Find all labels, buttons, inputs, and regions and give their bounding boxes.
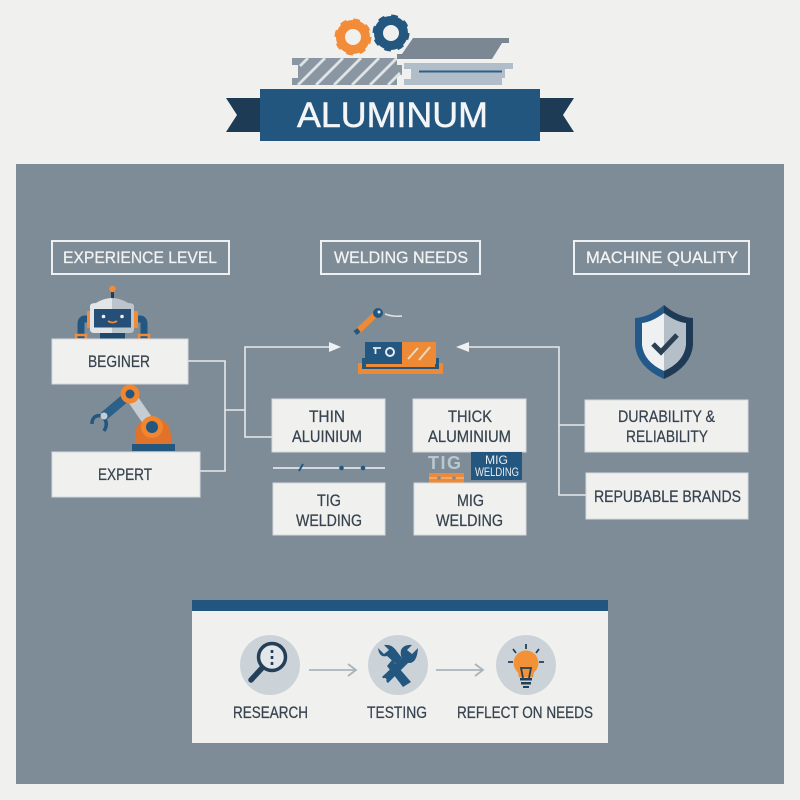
- heading: experience level: EXPERIENCE LEVEL: [63, 248, 217, 267]
- icon: testing tools: [368, 635, 428, 695]
- icon: thin weld seam: [273, 464, 385, 471]
- icon: welding machine: [358, 342, 443, 374]
- icon: MIG welding tag: WELDING: [475, 467, 519, 479]
- box: thick aluminium: THICK: [448, 408, 492, 426]
- box: durability and reliability: [585, 400, 748, 452]
- icon: shield with check: [635, 305, 693, 379]
- icon: blue gear: [375, 17, 407, 49]
- heading: machine quality: MACHINE QUALITY: [586, 248, 738, 267]
- box: expert: EXPERT: [98, 466, 152, 484]
- box: tig welding: [273, 483, 385, 535]
- icon: robot: [76, 286, 149, 339]
- icon: MIG welding tag: MIG: [485, 455, 508, 467]
- title: ALUMINUM: [297, 96, 488, 135]
- heading: welding needs: [321, 241, 480, 274]
- lower right plate: [404, 63, 513, 85]
- banner body: [260, 89, 540, 141]
- box: mig welding: WELDING: [436, 512, 503, 530]
- box: expert: [52, 452, 200, 497]
- icon: TIG label with plate: [428, 453, 464, 483]
- arrow: research to testing: [309, 664, 356, 676]
- icon: MIG welding tag: [471, 452, 522, 480]
- box: thin aluminium: [272, 399, 385, 452]
- box: thin aluminium: ALUINIUM: [292, 428, 362, 446]
- heading: machine quality: [574, 241, 749, 274]
- left ribbon tail: [226, 98, 260, 132]
- box: repubable brands: [586, 473, 748, 519]
- arrow: testing to reflect: [436, 664, 483, 676]
- heading: experience level: [52, 241, 229, 274]
- icon: reflect light bulb: [496, 635, 556, 695]
- arrow: machine quality connector: [456, 342, 586, 495]
- label: testing: TESTING: [367, 704, 427, 722]
- box: repubable brands: REPUBABLE BRANDS: [594, 488, 741, 506]
- arrow: experience level connector: [188, 342, 341, 471]
- panel: process steps: [192, 600, 608, 743]
- header illustration: gears and aluminum plates: [292, 17, 513, 85]
- box: thick aluminium: [413, 399, 526, 452]
- label: reflect on needs: REFLECT ON NEEDS: [457, 704, 593, 722]
- title banner: [226, 89, 574, 141]
- icon: TIG label with plate: TIG: [428, 453, 461, 473]
- box: thin aluminium: THIN: [309, 408, 345, 426]
- icon: welding torch: [355, 308, 402, 333]
- box: durability and reliability: DURABILITY &: [618, 408, 715, 426]
- left hatched plate: [292, 58, 402, 85]
- heading: welding needs: WELDING NEEDS: [334, 248, 468, 267]
- box: mig welding: MIG: [457, 492, 484, 510]
- panel: main decision diagram: [16, 164, 784, 784]
- icon: robotic arm: [92, 384, 175, 451]
- process panel top bar: [192, 600, 608, 611]
- label: research: RESEARCH: [233, 704, 308, 722]
- box: thick aluminium: ALUMINIUM: [428, 428, 511, 446]
- upper right plate: [397, 38, 509, 59]
- box: tig welding: TIG: [317, 492, 341, 510]
- box: beginer: BEGINER: [88, 353, 150, 371]
- box: beginer: [52, 339, 188, 384]
- box: tig welding: WELDING: [296, 512, 362, 530]
- icon: orange gear: [337, 21, 369, 53]
- icon: research magnifier: [240, 635, 300, 695]
- box: durability and reliability: RELIABILITY: [626, 428, 708, 446]
- box: mig welding: [414, 483, 526, 535]
- right ribbon tail: [540, 98, 574, 132]
